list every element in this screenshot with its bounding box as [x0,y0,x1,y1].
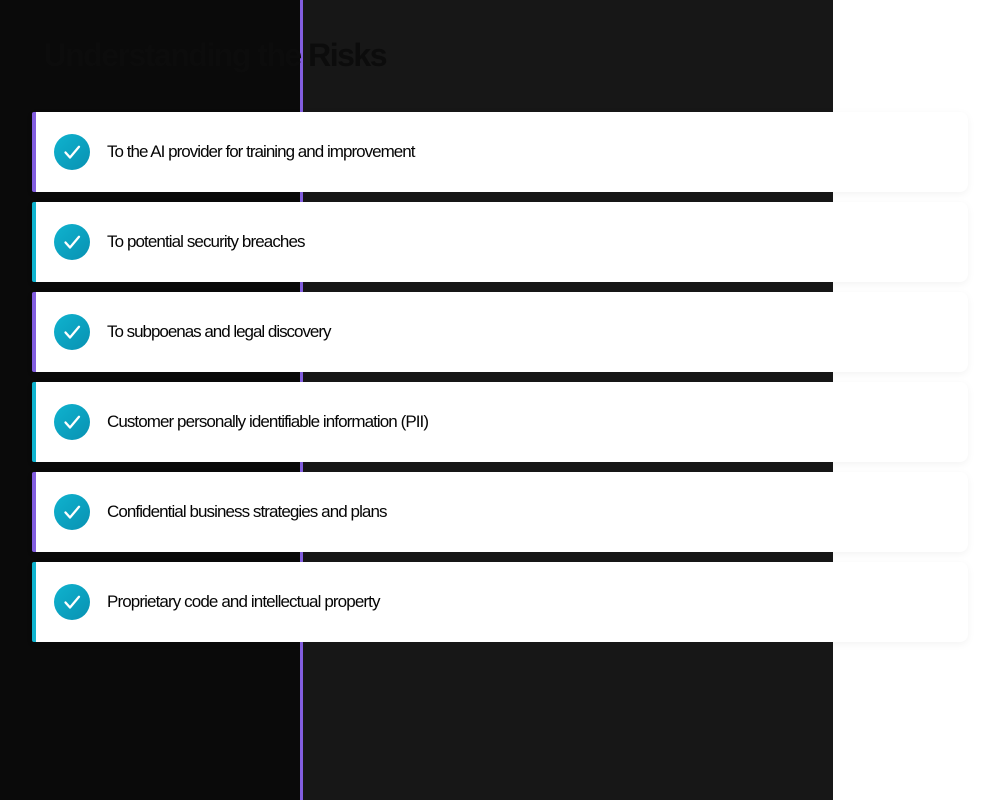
text: subpoenas: To subpoenas and legal discovery [107,322,332,341]
icon: check [54,494,90,530]
text: security breaches: To potential security breaches [107,232,305,251]
text: business strategies: Confidential business strategies and plans [107,502,388,521]
right dark background panel [303,0,833,800]
text: AI provider: To the AI provider for training and improvement [107,142,416,161]
purple vertical line [300,0,303,800]
icon: check [54,314,90,350]
icon: check [54,224,90,260]
left dark background panel [0,0,300,800]
list item: PII [32,382,968,462]
list item: proprietary code [32,562,968,642]
list item: AI provider [32,112,968,192]
text: proprietary code: Proprietary code and intellectual property [107,592,381,611]
icon: check [54,584,90,620]
list item: business strategies [32,472,968,552]
title: Understanding the Risks [44,37,388,73]
icon: check [54,404,90,440]
list item: subpoenas [32,292,968,372]
text: PII: Customer personally identifiable information (PII) [107,412,429,431]
icon: check [54,134,90,170]
list item: security breaches [32,202,968,282]
